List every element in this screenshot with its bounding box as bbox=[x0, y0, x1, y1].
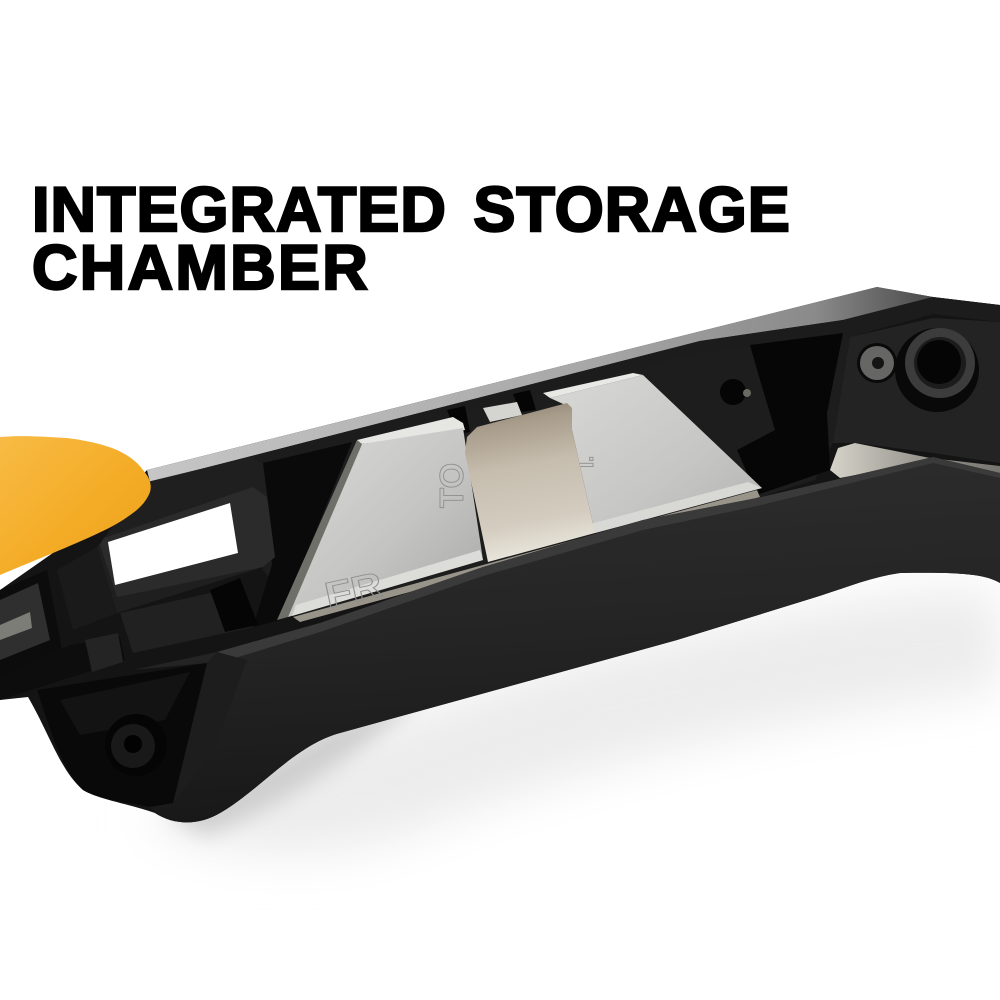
blade right bbox=[543, 373, 762, 533]
chamber back wall bbox=[263, 337, 850, 615]
screw socket bbox=[895, 328, 979, 412]
blade top stack bbox=[543, 373, 643, 398]
title: INTEGRATED STORAGE bbox=[32, 175, 791, 245]
blade bevel bbox=[292, 550, 483, 616]
blade face bbox=[550, 375, 762, 533]
title: CHAMBER bbox=[32, 233, 370, 303]
blade face bbox=[288, 428, 483, 617]
blade mark TO: TO bbox=[433, 463, 470, 508]
tool handle bbox=[0, 287, 1000, 822]
blade back edge bbox=[277, 440, 362, 620]
hinge mechanism bbox=[0, 547, 125, 700]
blade left bbox=[277, 417, 483, 620]
ledge under blades bbox=[293, 490, 760, 622]
window frame bbox=[97, 457, 275, 613]
top face highlight bbox=[147, 287, 933, 482]
nose piece bbox=[37, 663, 207, 807]
blade mark R: FR bbox=[321, 565, 386, 616]
small centre tab bbox=[483, 402, 522, 422]
title bbox=[32, 175, 791, 303]
window opening bbox=[108, 503, 238, 585]
cast shadow under tool bbox=[140, 589, 1000, 853]
black sliver below window bbox=[210, 578, 258, 632]
front screw bbox=[105, 714, 167, 776]
orange slider bbox=[0, 436, 151, 575]
handle body bbox=[0, 287, 1000, 822]
rail facet bbox=[173, 652, 247, 803]
front rail bbox=[133, 457, 1000, 822]
blade bevel bbox=[590, 482, 762, 533]
black recess right bbox=[737, 333, 843, 495]
spring clip bbox=[465, 403, 595, 562]
rail top highlight bbox=[217, 457, 1000, 658]
rear post bbox=[833, 318, 1000, 463]
blade top stack bbox=[357, 417, 465, 444]
rear metal glint bbox=[830, 443, 1000, 482]
blade mark T: I. bbox=[573, 456, 598, 468]
small screw bbox=[857, 343, 897, 383]
block below window bbox=[120, 593, 253, 653]
pin hole bbox=[720, 379, 751, 405]
nose highlight bbox=[60, 672, 190, 735]
black recess left bbox=[253, 442, 352, 627]
rear top rim bbox=[150, 297, 1000, 496]
black supports by tab bbox=[447, 390, 536, 434]
